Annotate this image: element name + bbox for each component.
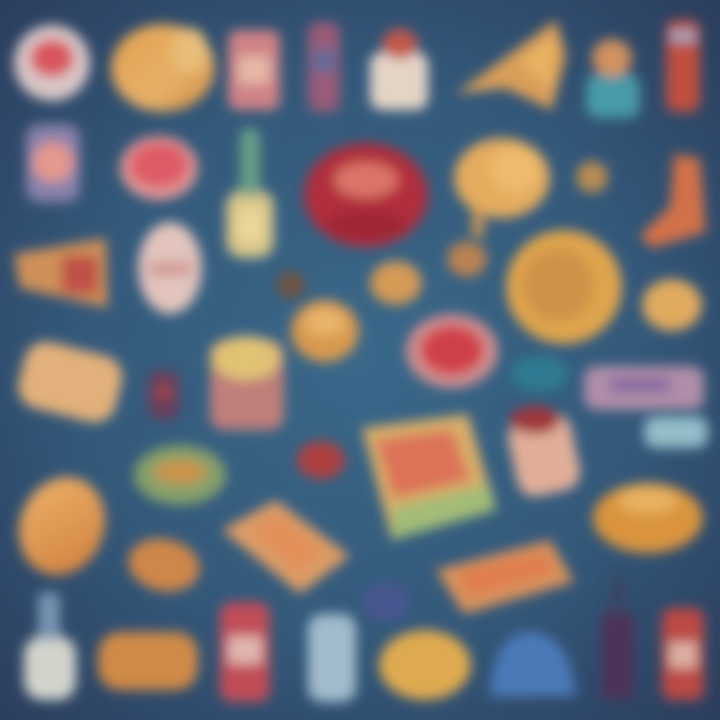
icon: pastry tray bbox=[222, 500, 350, 594]
icon: pale blue packet bbox=[644, 416, 708, 448]
icon: small jar bbox=[26, 124, 80, 202]
icon: green glass bottle bbox=[226, 128, 274, 258]
icon: white jar with red lid bbox=[370, 29, 428, 110]
icon: small brown dot bbox=[277, 271, 305, 299]
icon: milk bottle bbox=[138, 222, 202, 314]
icon: small round orange bbox=[447, 241, 487, 277]
icon: purple and pink packet bbox=[584, 366, 704, 410]
icon: colourful snack box bbox=[14, 238, 108, 308]
icon: sausage tray bbox=[436, 540, 574, 614]
icon: large red tomato bbox=[304, 143, 428, 247]
icon: teal cup bbox=[586, 39, 640, 118]
icon: bread loaf bbox=[111, 24, 215, 112]
icon: sandwich loaf bbox=[14, 337, 127, 427]
icon: baguette bbox=[4, 464, 120, 588]
icon: layered cake bbox=[362, 414, 496, 540]
icon: red drink can bbox=[220, 602, 270, 702]
icon: roast chicken bbox=[454, 138, 550, 238]
icon: milk bottle bbox=[24, 592, 76, 700]
icon: red sauce bottle bbox=[662, 608, 704, 700]
icon: small round bun bbox=[370, 261, 422, 305]
icon: small roll bbox=[123, 532, 205, 598]
icon: blue item bbox=[511, 356, 569, 392]
icon: red bottle bbox=[666, 20, 700, 112]
icon: slim bottle bbox=[308, 22, 340, 112]
icon: blue dome bbox=[490, 632, 576, 696]
icon: dark small bottle bbox=[148, 370, 180, 420]
icon: croissant bbox=[593, 483, 703, 553]
icon: small snack bbox=[576, 161, 608, 193]
icon: small purple item bbox=[363, 583, 409, 621]
icon: green salad dish bbox=[134, 445, 226, 505]
icon: red can bbox=[228, 30, 280, 110]
icon: tall tin bbox=[210, 336, 284, 430]
icon: red plate bbox=[406, 314, 498, 388]
icon: pizza slice bbox=[456, 20, 566, 110]
icon: hot dog bbox=[98, 632, 198, 690]
icon: red bowl bbox=[120, 136, 198, 200]
icon: pale can bbox=[308, 614, 356, 702]
icon: orange boot-shaped item bbox=[640, 154, 706, 248]
icon: bun bbox=[291, 300, 359, 362]
icon: small pastry bbox=[642, 279, 702, 331]
icon: small red fruit bbox=[297, 441, 345, 479]
icon: red and white plate bbox=[14, 25, 90, 101]
icon: round biscuit bbox=[506, 230, 622, 344]
icon: potato bun bbox=[379, 630, 471, 700]
icon: red capped jar bbox=[505, 406, 584, 500]
icon: dark bottle bbox=[602, 576, 634, 700]
